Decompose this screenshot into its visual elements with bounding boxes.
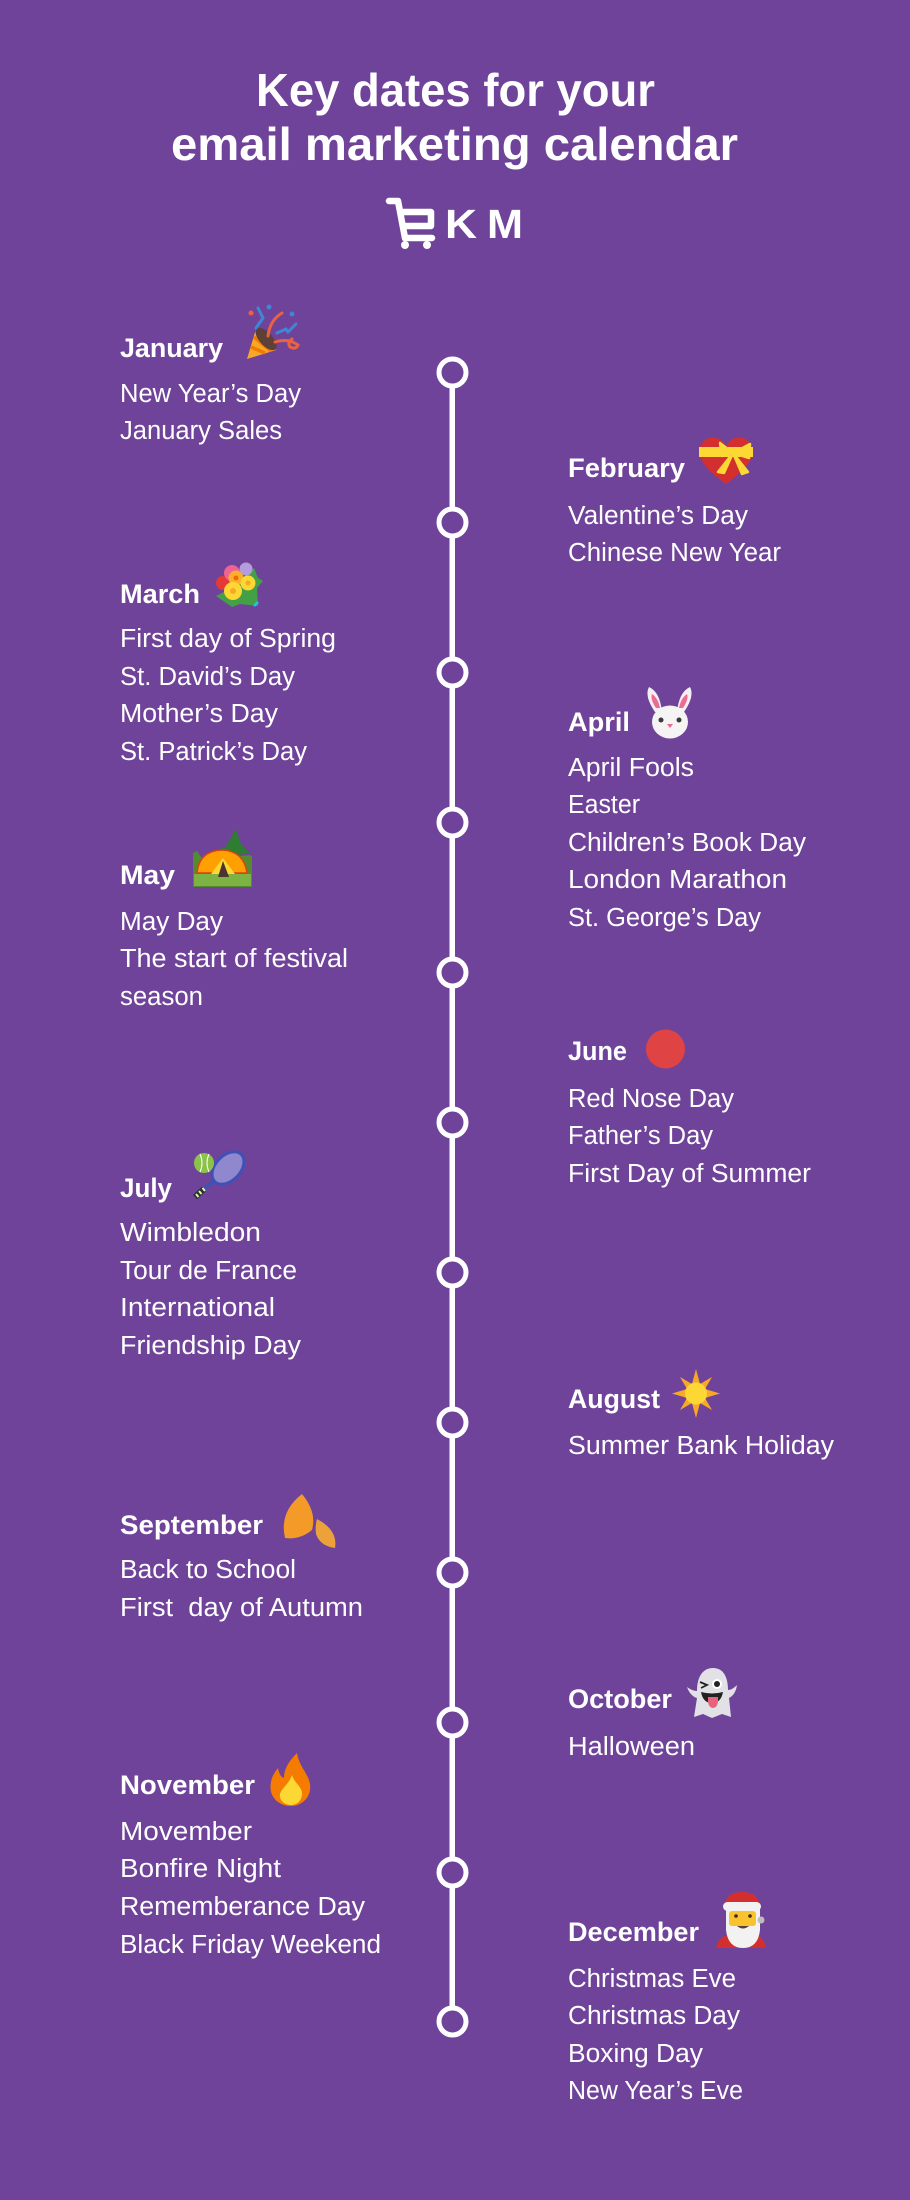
- panel: July: Wimbledon: [120, 1219, 261, 1247]
- panel: July: Friendship Day: [120, 1332, 301, 1360]
- icon: tent: [193, 829, 252, 887]
- panel: May: season: [120, 983, 203, 1011]
- title: Key dates for your: [256, 64, 655, 116]
- panel: April: St. George’s Day: [568, 904, 761, 932]
- timeline: [439, 359, 466, 2035]
- panel: September: Back to School: [120, 1556, 296, 1584]
- panel: June: Red Nose Day: [568, 1085, 734, 1113]
- panel: September: September: [120, 1510, 263, 1540]
- panel: May: May Day: [120, 908, 223, 936]
- panel: July: [120, 1146, 301, 1360]
- panel: October: [568, 1668, 737, 1761]
- panel: November: Bonfire Night: [120, 1855, 281, 1883]
- panel: July: July: [120, 1173, 172, 1203]
- panel: June: Father’s Day: [568, 1122, 713, 1150]
- panel: February: Chinese New Year: [568, 539, 782, 567]
- panel: January: [120, 304, 301, 445]
- icon: tennis racket and ball: [194, 1146, 250, 1197]
- panel: September: [120, 1494, 363, 1622]
- panel: July: Tour de France: [120, 1257, 297, 1285]
- panel: March: First day of Spring: [120, 625, 336, 653]
- icon: heart with ribbon: [699, 437, 753, 484]
- panel: November: Rememberance Day: [120, 1893, 365, 1921]
- panel: December: [568, 1892, 766, 2105]
- panel: April: London Marathon: [568, 866, 787, 894]
- panel: May: [120, 829, 348, 1011]
- panel: June: June: [568, 1036, 627, 1066]
- panel: January: January Sales: [120, 417, 282, 445]
- panel: December: New Year’s Eve: [568, 2077, 743, 2105]
- icon: ghost: [687, 1668, 737, 1718]
- panel: November: November: [120, 1770, 255, 1800]
- panel: March: [120, 562, 336, 766]
- title: email marketing calendar: [171, 118, 738, 170]
- logo: EKM cart: [389, 201, 523, 249]
- panel: May: The start of festival: [120, 945, 348, 973]
- panel: June: [568, 1030, 812, 1188]
- panel: April: April: [568, 707, 630, 737]
- panel: April: Easter: [568, 791, 640, 819]
- panel: February: February: [568, 453, 685, 483]
- panel: March: Mother’s Day: [120, 700, 278, 728]
- panel: March: St. Patrick’s Day: [120, 738, 307, 766]
- panel: August: August: [568, 1384, 660, 1414]
- panel: February: [568, 437, 782, 567]
- panel: January: January: [120, 333, 223, 363]
- icon: santa: [716, 1892, 766, 1948]
- panel: July: International: [120, 1294, 275, 1322]
- panel: December: Boxing Day: [568, 2040, 703, 2068]
- panel: April: [568, 687, 806, 932]
- panel: April: Children’s Book Day: [568, 829, 806, 857]
- icon: autumn leaves: [284, 1494, 335, 1548]
- panel: November: [120, 1753, 381, 1959]
- panel: February: Valentine’s Day: [568, 502, 748, 530]
- panel: December: December: [568, 1917, 699, 1947]
- icon: rabbit: [647, 687, 692, 738]
- title: [171, 64, 738, 170]
- panel: April: April Fools: [568, 754, 694, 782]
- logo: EKM cart: K: [445, 201, 477, 247]
- logo: EKM cart: M: [487, 201, 523, 247]
- panel: September: First day of Autumn: [120, 1594, 363, 1622]
- icon: sun: [672, 1369, 720, 1418]
- icon: red circle: [646, 1030, 685, 1068]
- panel: August: Summer Bank Holiday: [568, 1432, 834, 1460]
- panel: December: Christmas Day: [568, 2002, 740, 2030]
- panel: June: First Day of Summer: [568, 1160, 812, 1188]
- panel: March: March: [120, 579, 200, 609]
- panel: December: Christmas Eve: [568, 1965, 736, 1993]
- panel: October: Halloween: [568, 1733, 695, 1761]
- panel: March: St. David’s Day: [120, 663, 295, 691]
- panel: January: New Year’s Day: [120, 380, 301, 408]
- panel: November: Black Friday Weekend: [120, 1931, 381, 1959]
- icon: party popper: [247, 304, 298, 359]
- icon: bouquet: [216, 562, 263, 607]
- panel: August: [568, 1369, 834, 1460]
- icon: fire: [270, 1753, 310, 1806]
- panel: November: Movember: [120, 1818, 253, 1846]
- panel: May: May: [120, 860, 175, 890]
- panel: October: October: [568, 1684, 672, 1714]
